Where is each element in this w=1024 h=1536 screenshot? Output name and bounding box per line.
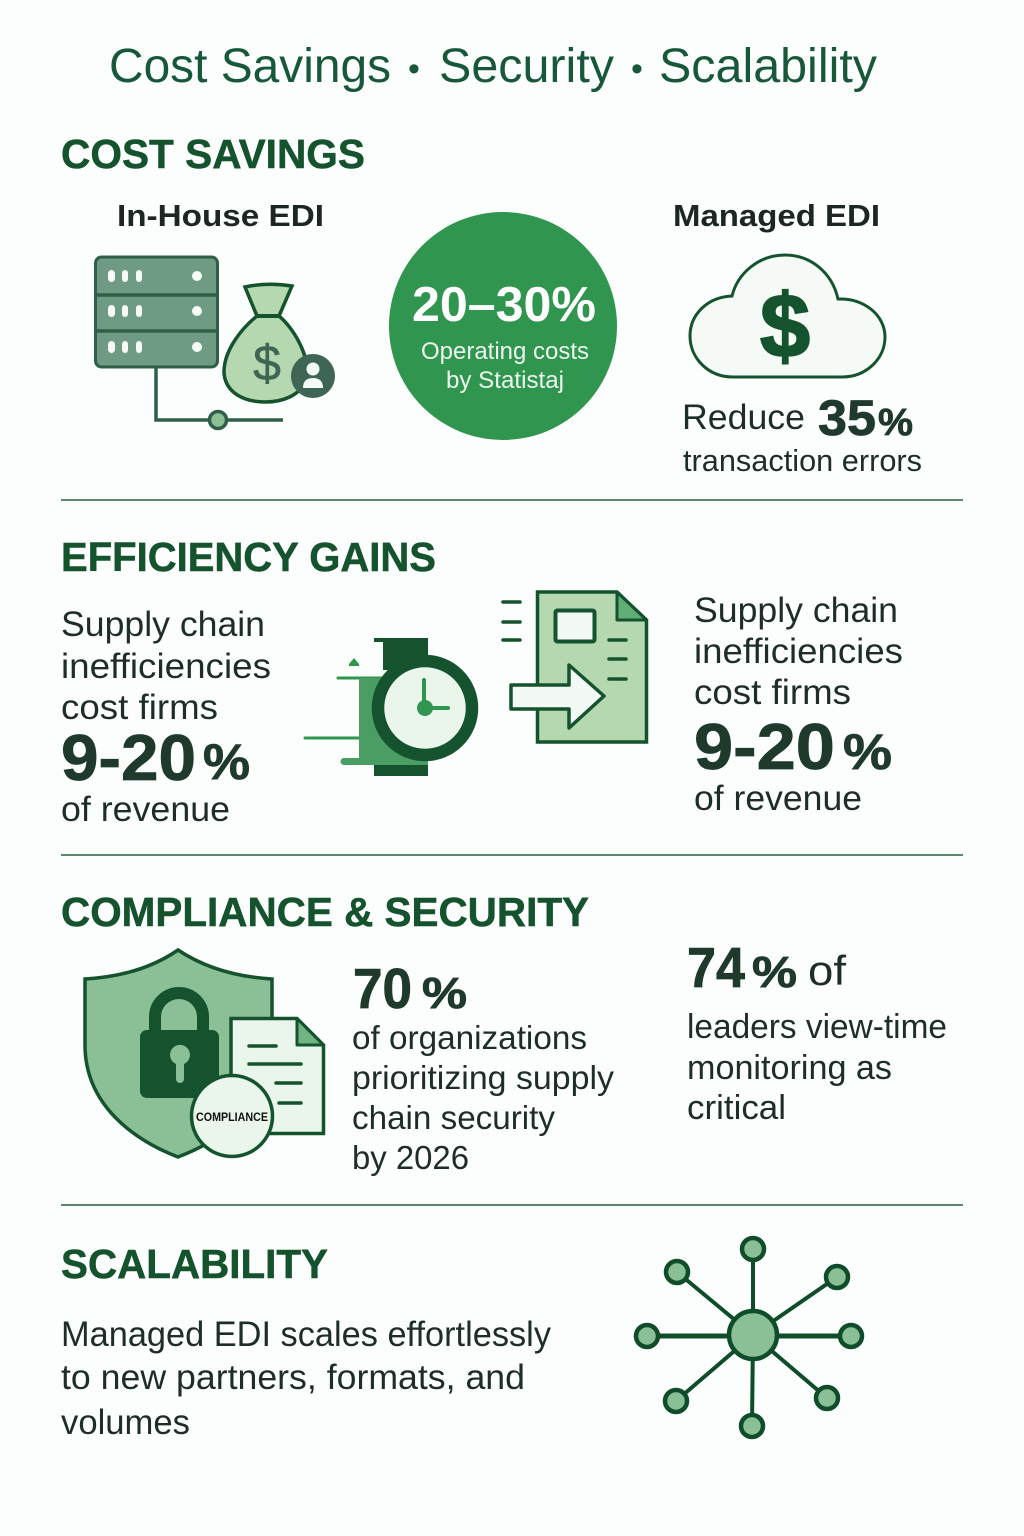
heading: cost savings: COST SAVINGS [61,131,365,177]
title [109,40,877,93]
panel: compliance and security [61,889,947,1176]
icon: money bag with user badge: $ [253,335,281,391]
in-house column label: In-House EDI [117,198,324,233]
icon: shield with lock and compliance document: COMPLIANCE [196,1112,268,1124]
stat circle: 20-30%: by Statistaj [446,367,564,394]
stat: reduce 35% errors: Reduce [682,398,805,437]
icon: money bag with user badge [224,284,335,402]
text block: right stat: of revenue [694,779,862,818]
text block: left stat [61,605,271,829]
text block: right stat: % [843,724,892,780]
panel: efficiency gains [61,534,903,829]
title: Scalability [659,40,877,93]
text block: left stat: inefficiencies [61,647,271,686]
icon: hub and spoke network [636,1238,862,1437]
title: Cost Savings [109,40,391,93]
text block: scalability description: to new partners, formats, and [61,1358,525,1397]
icon: stopwatch [305,638,472,776]
stat: reduce 35% errors: % [878,402,913,444]
text block: 74% stat: of [808,947,846,994]
stat circle: 20-30% [389,212,617,440]
stat: reduce 35% errors [682,390,922,478]
text block: right stat: inefficiencies [694,632,903,671]
icon: shield with lock and compliance document [85,950,324,1157]
text block: 74% stat: monitoring as [687,1049,892,1087]
text block: 70% stat [352,957,615,1176]
panel: scalability [61,1238,862,1442]
icon: cloud with dollar: $ [760,277,810,377]
text block: 74% stat: critical [687,1089,786,1127]
title: Security [439,40,614,93]
heading: compliance and security: COMPLIANCE & SECURITY [61,889,589,935]
text block: 74% stat: 74 [687,936,745,1000]
title: • [408,50,420,88]
text block: left stat: % [203,734,250,790]
stat circle: 20-30%: 20–30% [412,278,596,332]
text block: 70% stat: prioritizing supply [352,1059,615,1096]
text block: 74% stat [687,936,947,1127]
text block: scalability description: Managed EDI scales effortlessly [61,1315,551,1354]
panel: cost savings [61,131,922,478]
text block: right stat: Supply chain [694,591,898,630]
managed column label: Managed EDI [673,198,880,233]
text block: 70% stat: % [422,969,467,1018]
text block: left stat: Supply chain [61,605,265,644]
text block: 70% stat: chain security [352,1099,555,1136]
text block: right stat: cost firms [694,673,851,712]
text block: 70% stat: by 2026 [352,1139,469,1176]
heading: scalability: SCALABILITY [61,1241,328,1287]
stat circle: 20-30%: Operating costs [421,338,589,365]
icon: document with arrow [503,592,646,742]
text block: right stat: 9-20 [694,710,835,783]
icon: server rack [96,257,283,428]
stat: reduce 35% errors: 35 [818,390,876,446]
text block: left stat: of revenue [61,790,230,829]
text block: scalability description [61,1315,551,1442]
stat: reduce 35% errors: transaction errors [683,443,922,478]
text block: scalability description: volumes [61,1403,190,1442]
text block: 74% stat: leaders view-time [687,1008,947,1046]
text block: 70% stat: 70 [353,957,412,1021]
icon: cloud with dollar [690,255,885,377]
text block: left stat: cost firms [61,688,218,727]
text block: right stat [694,591,903,818]
text block: 70% stat: of organizations [352,1019,587,1056]
heading: efficiency gains: EFFICIENCY GAINS [61,534,436,580]
text block: 74% stat: % [752,948,797,997]
text block: left stat: 9-20 [61,721,196,794]
title: • [631,50,643,88]
